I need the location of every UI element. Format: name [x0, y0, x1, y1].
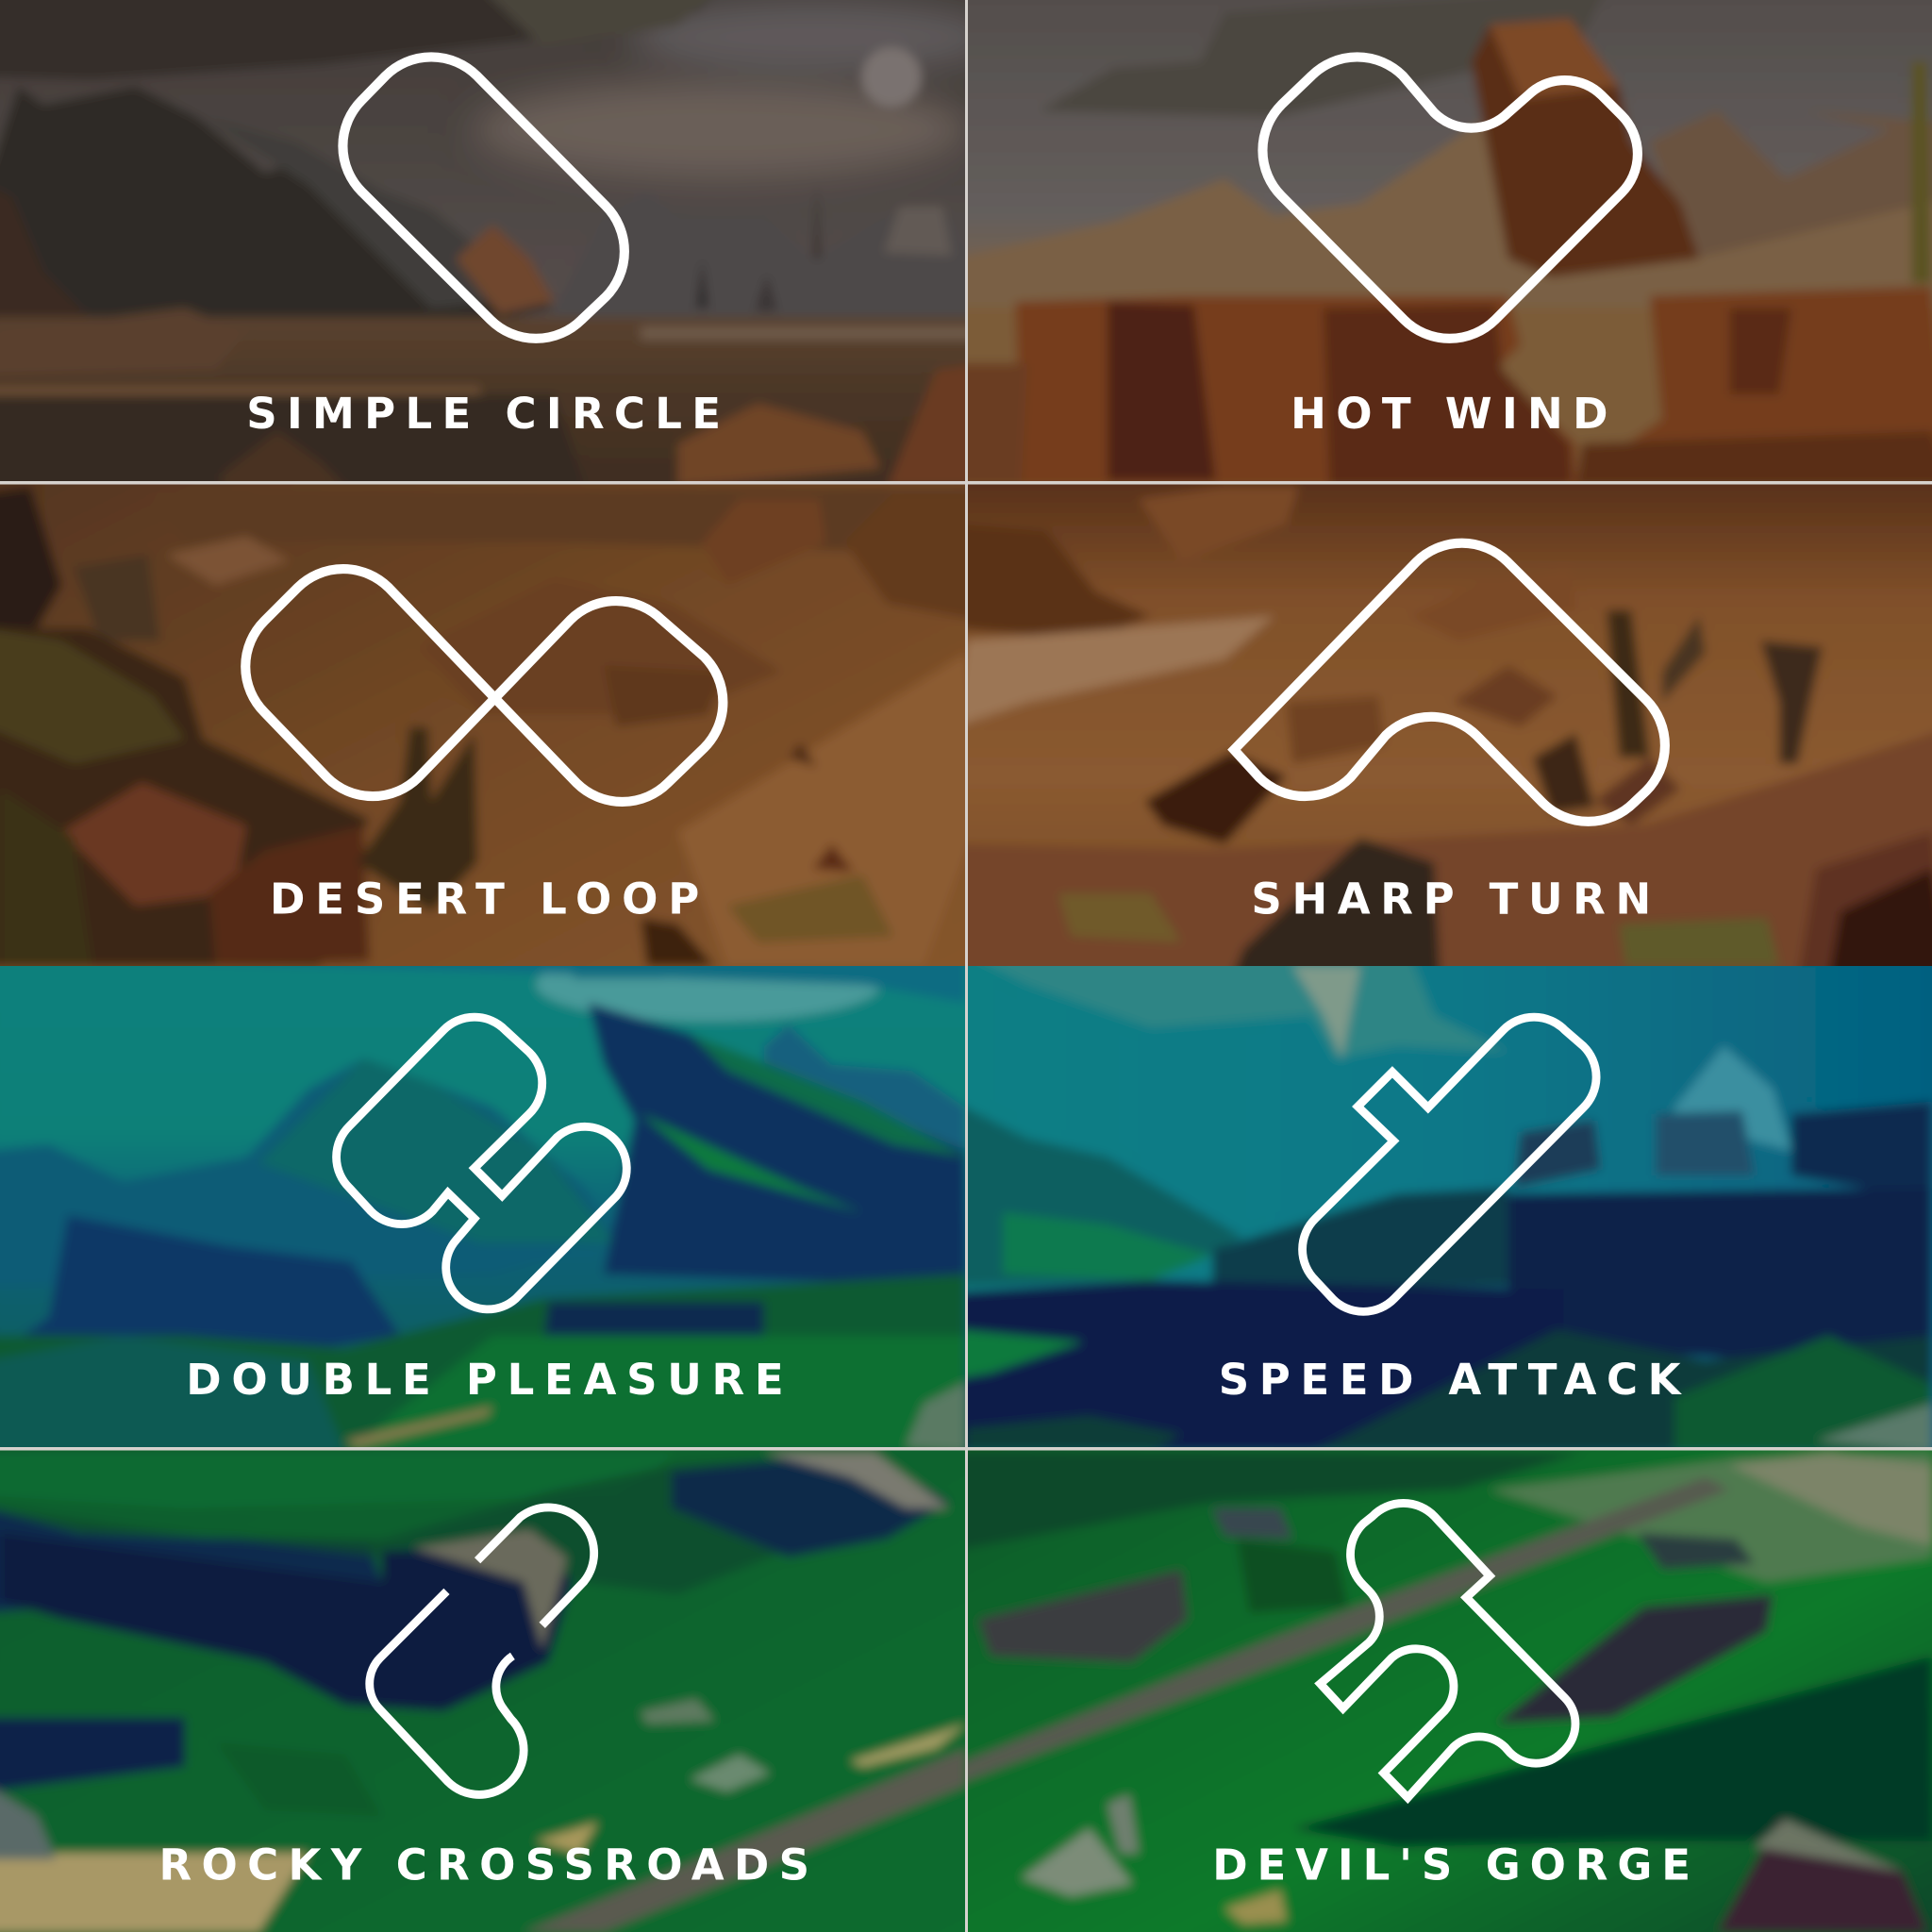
track icon: hot wind — [1262, 57, 1638, 339]
track icon: sharp turn — [1234, 543, 1665, 822]
painting: sand-blown plain with cacti — [954, 475, 1932, 986]
track icon: desert loop — [245, 569, 723, 802]
label: SIMPLE CIRCLE: SIMPLE CIRCLE — [246, 389, 721, 439]
track icon: simple circle — [342, 57, 625, 339]
painting: blue sky above dark canyon wall — [954, 954, 1932, 1458]
panel: top-right quadrant, desert tracks — [954, 0, 1932, 986]
painting: dusty valley under storm clouds — [0, 0, 998, 492]
label: ROCKY CROSSROADS: ROCKY CROSSROADS — [158, 1840, 809, 1890]
label: DEVIL'S GORGE: DEVIL'S GORGE — [1212, 1840, 1690, 1890]
painting: green plateau, dark cliff and road — [0, 1441, 986, 1932]
label: HOT WIND: HOT WIND — [1291, 389, 1607, 439]
painting: sandstorm over red rocks — [0, 475, 986, 979]
tile: Hot Wind — [954, 0, 1932, 492]
painting: green slope, road and boulders — [954, 1441, 1932, 1932]
panel: bottom-right quadrant, valley tracks — [954, 954, 1932, 1932]
panel: bottom-left quadrant, valley tracks — [0, 947, 986, 1932]
tile: Speed Attack — [954, 954, 1932, 1458]
track icon: rocky crossroads, broken line — [370, 1507, 594, 1794]
painting: teal sky over green valley and cliffs — [0, 947, 986, 1458]
label: SPEED ATTACK: SPEED ATTACK — [1219, 1355, 1683, 1405]
label: DESERT LOOP: DESERT LOOP — [270, 874, 699, 924]
label: DOUBLE PLEASURE: DOUBLE PLEASURE — [186, 1355, 784, 1405]
tile: Sharp Turn — [954, 475, 1932, 986]
track icon: double pleasure — [337, 1017, 626, 1309]
tile: Simple Circle — [0, 0, 998, 492]
track icon: speed attack — [1303, 1017, 1596, 1311]
label: SHARP TURN: SHARP TURN — [1251, 874, 1651, 924]
tile: Double Pleasure — [0, 947, 986, 1458]
track icon: devil's gorge — [1321, 1503, 1575, 1798]
tile: Devil's Gorge — [954, 1441, 1932, 1932]
tile: Desert Loop — [0, 475, 986, 979]
painting: ruined mesas and tall butte — [954, 0, 1932, 492]
panel: top-left quadrant, desert tracks — [0, 0, 998, 979]
tile: Rocky Crossroads — [0, 1441, 986, 1932]
